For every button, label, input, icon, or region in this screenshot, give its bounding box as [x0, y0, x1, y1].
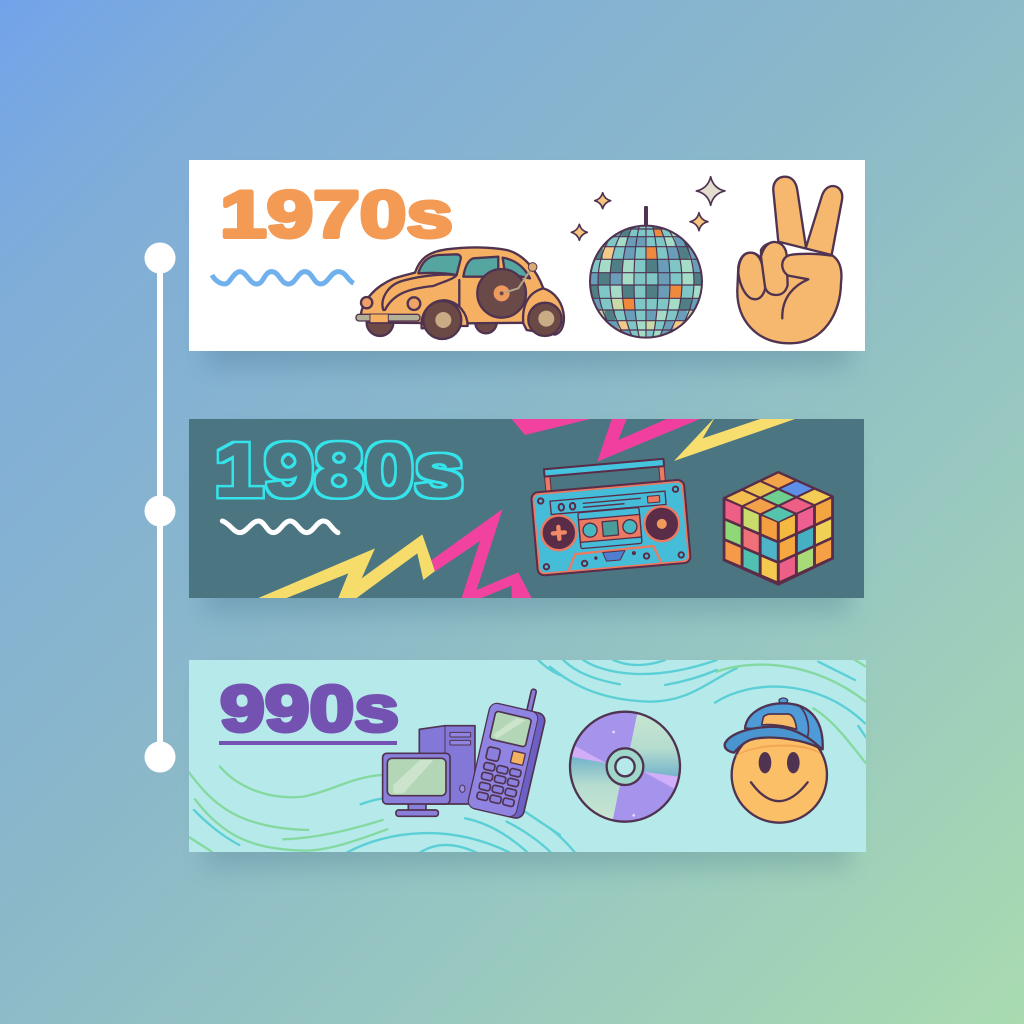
icon: disco ball [589, 206, 703, 339]
panel: 1970s [189, 160, 865, 351]
panel: 1980s [189, 419, 864, 598]
icon: mobile phone [467, 681, 551, 820]
icon: boombox [529, 457, 691, 576]
wavy line: blue [212, 272, 354, 284]
icon: smiley with backwards cap [725, 698, 827, 823]
icon: beetle car with vinyl record [356, 247, 564, 339]
wavy line: white [222, 521, 338, 533]
heading: 1980s: 1980s [214, 428, 464, 512]
lightning bolts: lower left [258, 509, 532, 598]
lightning bolts: upper right [512, 419, 795, 462]
swirl lines [188, 660, 866, 853]
heading: 1990s: 990s [220, 672, 399, 745]
icon: sparkles [571, 177, 725, 240]
icon: desktop computer [383, 726, 475, 816]
timeline [144, 242, 176, 772]
icon: rubik's cube [724, 472, 833, 584]
icon: peace hand [737, 177, 842, 343]
timeline node: 1980s [144, 496, 176, 526]
panel: 1990s [188, 660, 866, 853]
icon: compact disc [570, 712, 680, 822]
timeline node: 1990s [144, 742, 176, 772]
heading: 1970s: 1970s [220, 177, 453, 251]
timeline node: 1970s [144, 242, 176, 274]
heading underline [219, 741, 397, 745]
